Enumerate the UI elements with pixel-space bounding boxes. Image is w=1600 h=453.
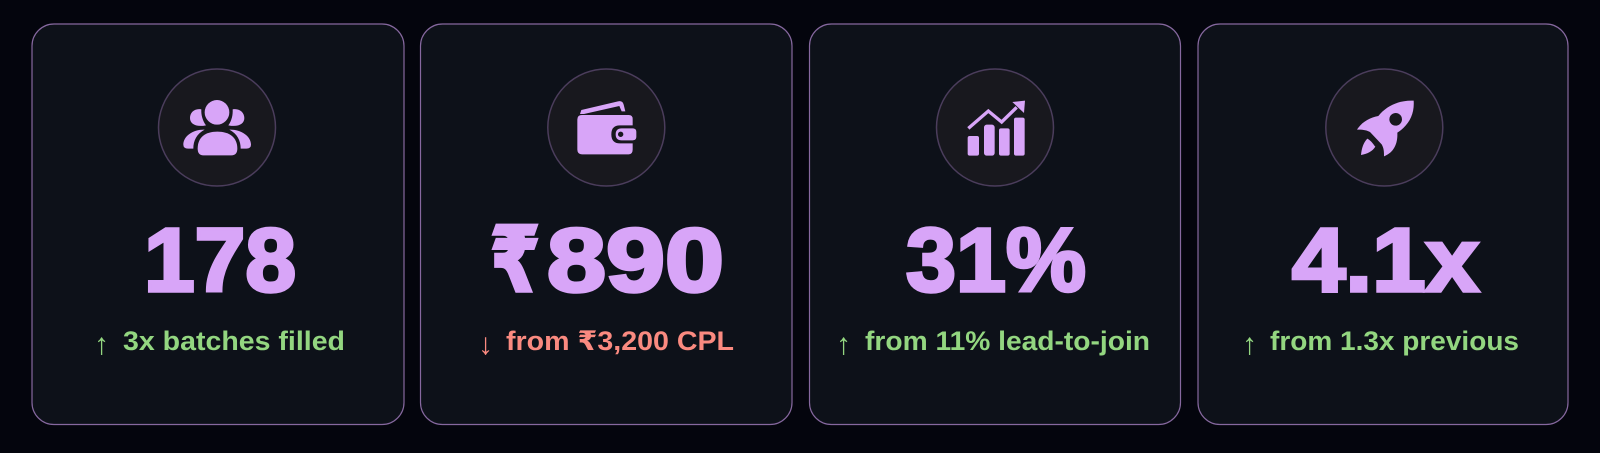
trend: from 1.3x previous: from 1.3x previous [1270, 326, 1519, 356]
metric: 178: 178 [144, 211, 296, 311]
trend: from 1.3x previous: ↑ [1242, 328, 1257, 361]
panel: cost per lead [420, 24, 792, 424]
metric: ₹890: 890 [547, 211, 724, 311]
trend: from 11% lead-to-join: from 11% lead-to-join [865, 326, 1150, 356]
icon: wallet [548, 69, 665, 186]
trend: from ₹3,200 CPL: ↓ [478, 328, 493, 361]
icon: growth chart [936, 69, 1054, 186]
trend: from ₹3,200 CPL: from ₹3,200 CPL [506, 326, 734, 356]
panel: batches filled [32, 24, 404, 424]
icon: rocket [1326, 69, 1443, 186]
metric: 31%: 31% [906, 211, 1086, 311]
trend: 3x batches filled: ↑ [94, 328, 109, 361]
panel: lead-to-join [810, 24, 1180, 424]
trend: 3x batches filled: 3x batches filled [123, 326, 345, 356]
icon: people [158, 69, 276, 186]
trend: from 11% lead-to-join: ↑ [836, 328, 851, 361]
panel: return multiple [1198, 24, 1568, 424]
metric: ₹890 [490, 211, 724, 311]
metric: ₹890: ₹ [490, 211, 540, 311]
metric: 4.1x: 4.1x [1292, 211, 1479, 311]
